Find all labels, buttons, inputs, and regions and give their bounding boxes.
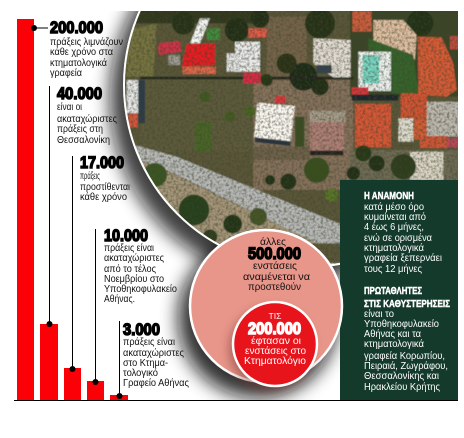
bar: 3.000	[110, 395, 128, 400]
text block: delay champions: Υποθηκοφυλακείο	[364, 318, 439, 330]
stat: 3.000: ακαταχώριστες	[123, 347, 184, 359]
stat: 200.000: κτηματολογικά	[50, 57, 107, 69]
stat: 10.000: πράξεις είναι	[104, 242, 154, 254]
bar chart	[17, 19, 128, 400]
stat: 10.000: ακαταχώριστες	[104, 252, 164, 264]
stat: 200.000: 200.000	[50, 18, 103, 37]
text block: waiting: τους 12 μήνες	[364, 263, 422, 275]
stat: 10.000: Υποθηκοφυλακείο	[104, 283, 177, 295]
stat: 3.000: πράξεις είναι	[123, 336, 175, 348]
stat: 3.000: τολογικό	[123, 367, 158, 379]
circle: 500.000 expected objections: αναμένεται να	[243, 271, 310, 283]
heading: waiting: Η ΑΝΑΜΟΝΗ	[364, 191, 414, 202]
stat: 200.000: κάθε χρόνο στα	[50, 46, 113, 58]
text block: delay champions	[364, 308, 448, 393]
stat: 40.000: ακαταχώριστες	[57, 113, 117, 125]
stat: 3.000: 3.000	[123, 320, 160, 339]
circle: 200.000 objections reached	[233, 302, 317, 386]
stat: 10.000	[104, 226, 177, 305]
stat: 10.000: από το τέλος	[104, 263, 156, 275]
circle: 500.000 expected objections: προστεθούν	[248, 281, 301, 293]
circle: 500.000 expected objections	[190, 230, 342, 382]
text block: delay champions: Αθήνας και τα	[364, 328, 421, 340]
stat: 200.000: πράξεις λιμνάζουν	[50, 36, 123, 48]
stat: 40.000: 40.000	[57, 84, 102, 103]
bar: 40.000	[40, 324, 58, 400]
circle: 200.000 objections reached: ΤΙΣ	[268, 312, 282, 321]
text block: delay champions: Πειραιά, Ζωγράφου,	[364, 360, 448, 372]
stat: 17.000: κάθε χρόνο	[80, 191, 127, 203]
circle: 500.000 expected objections: ενστάσεις	[253, 260, 297, 272]
stat: 3.000	[123, 320, 189, 389]
circle: 200.000 objections reached: ενστάσεις στο	[245, 345, 306, 357]
circle shadow: red	[229, 307, 313, 391]
circle: 200.000 objections reached: Κτηματολόγιο	[244, 355, 306, 367]
axis line	[14, 400, 458, 401]
stat: 200.000	[50, 18, 123, 79]
stat: 40.000: Θεσσαλονίκη	[57, 134, 110, 146]
circle: 200.000 objections reached: 200.000	[248, 319, 301, 338]
circle: 500.000 expected objections: 500.000	[248, 244, 301, 263]
text block: waiting: κτηματολογικά	[364, 242, 424, 254]
stat: 40.000: είναι οι	[57, 101, 82, 113]
heading: delay champions: ΠΡΩΤΑΘΛΗΤΕΣ	[364, 286, 422, 297]
stat: 10.000: Νοεμβρίου στο	[104, 273, 164, 285]
text block: waiting	[364, 201, 442, 275]
text block: delay champions: Ηρακλείου Κρήτης	[364, 381, 440, 393]
stat: 40.000	[57, 84, 117, 146]
text block: delay champions: γραφεία Κορωπίου,	[364, 350, 445, 362]
bar: 200.000	[17, 19, 34, 400]
circle: 200.000 objections reached: έφτασαν οι	[251, 335, 301, 347]
stat: 3.000: στο Κτημα-	[123, 358, 168, 369]
stat: 10.000: Αθήνας.	[104, 293, 135, 305]
text block: waiting: ενώ σε ορισμένα	[364, 232, 432, 244]
bar: 10.000	[87, 381, 104, 400]
stat: 17.000	[80, 153, 130, 203]
text block: delay champions: κτηματολογικά	[364, 338, 424, 350]
stat: 3.000: Γραφείο Αθήνας	[123, 377, 189, 389]
text block: delay champions: είναι το	[364, 308, 394, 320]
shadows behind circles	[96, 11, 340, 400]
aerial photo circle	[120, 0, 464, 271]
stat: 40.000: πράξεις στη	[57, 123, 103, 135]
text block: waiting: κατά μέσο όρο	[364, 201, 424, 213]
text block: waiting: γραφεία ξεπερνάει	[364, 252, 442, 264]
stat: 17.000: 17.000	[80, 153, 124, 172]
panel: waiting time	[340, 180, 458, 400]
stat: 17.000: πράξεις	[80, 170, 100, 182]
text block: delay champions: Θεσσαλονίκης και	[364, 370, 439, 382]
heading: delay champions	[364, 286, 450, 310]
stat: 10.000: 10.000	[104, 226, 148, 245]
text block: waiting: 4 έως 6 μήνες,	[364, 221, 424, 233]
circle: 500.000 expected objections: άλλες	[260, 236, 286, 248]
bar: 17.000	[64, 368, 81, 400]
stat: 200.000: γραφεία	[50, 67, 82, 79]
stat: 17.000: προστίθενται	[80, 181, 130, 193]
leader lines	[31, 25, 122, 399]
text block: waiting: κυμαίνεται από	[364, 211, 426, 223]
